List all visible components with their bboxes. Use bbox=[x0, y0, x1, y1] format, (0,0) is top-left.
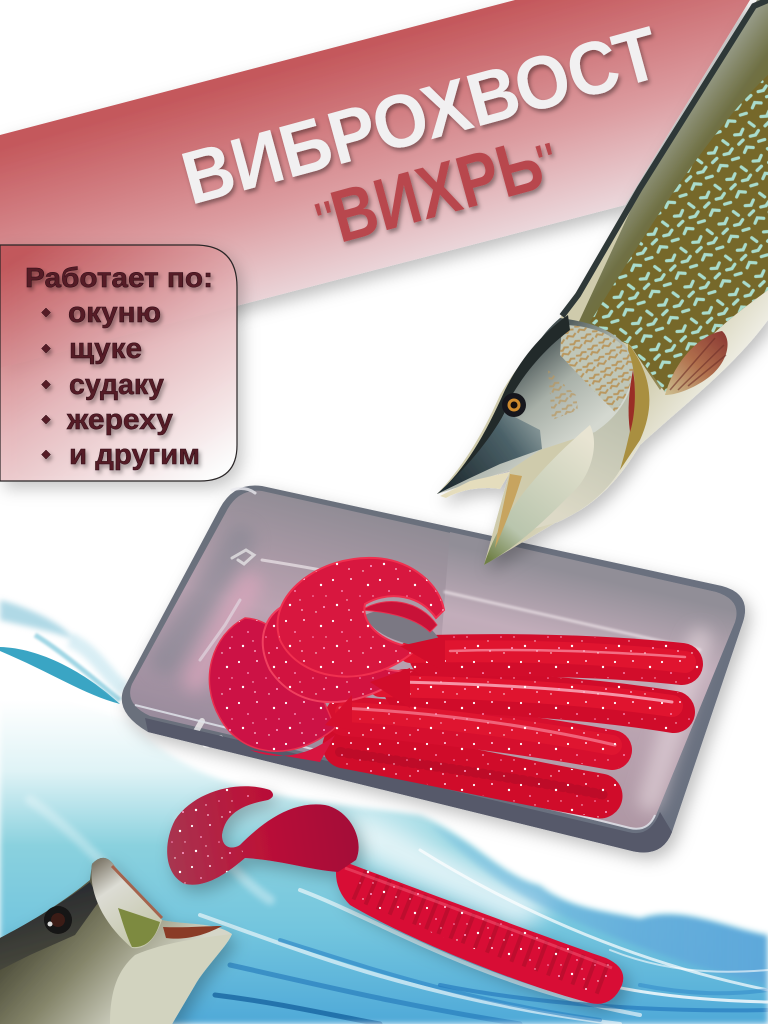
list items: окуню bbox=[68, 297, 161, 329]
pike back and pattern bbox=[575, 0, 768, 392]
bass eye bbox=[44, 906, 72, 934]
lure body 3 bbox=[345, 716, 612, 750]
lure sparkles bbox=[358, 884, 606, 980]
panel heading: Работает по: bbox=[25, 262, 213, 293]
lures in tray bbox=[209, 558, 685, 796]
water bbox=[0, 718, 768, 1024]
title quote close: " bbox=[530, 132, 565, 195]
bass lower jaw bbox=[110, 934, 232, 1024]
water streaks bbox=[30, 800, 768, 1024]
wave crest blue edge bbox=[430, 825, 768, 985]
bass bbox=[0, 858, 232, 1024]
tray floor right bbox=[430, 532, 736, 829]
bass upper jaw bbox=[91, 858, 162, 948]
pike gill plate bbox=[530, 370, 637, 530]
pike snout bbox=[437, 412, 542, 494]
pike upper lip bbox=[440, 472, 510, 498]
list items: судаку bbox=[69, 369, 164, 401]
lure necks bbox=[400, 636, 445, 672]
list items: жереху bbox=[66, 404, 173, 436]
white foam glow bbox=[350, 810, 560, 930]
lure body 1 bbox=[430, 655, 682, 664]
pike head ridge bbox=[437, 315, 570, 494]
title line 1: ВИБРОХВОСТ bbox=[173, 10, 668, 220]
hole behind tail bbox=[365, 610, 440, 645]
pike bbox=[437, 0, 768, 565]
pike head bbox=[437, 318, 636, 494]
lure body 2 bbox=[405, 690, 674, 712]
panel background bbox=[0, 245, 237, 481]
pike pectoral fin bbox=[665, 331, 728, 395]
list items bbox=[42, 297, 200, 471]
lure body 4 bbox=[345, 746, 600, 796]
title line 2: ВИХРЬ bbox=[322, 122, 552, 258]
tray floor bbox=[130, 491, 736, 829]
lure body bbox=[336, 862, 623, 1004]
tray outer shell bbox=[122, 485, 745, 852]
curl of second tail bbox=[362, 602, 437, 632]
tray reflections bbox=[165, 489, 700, 800]
panel: species list bbox=[0, 245, 237, 481]
wave background bbox=[0, 600, 768, 1024]
pike dorsal line bbox=[562, 0, 768, 316]
pike mouth bbox=[495, 474, 522, 548]
lure ribs bbox=[358, 884, 606, 980]
title quote open: " bbox=[309, 190, 344, 253]
lure tail bbox=[167, 786, 359, 885]
splash bbox=[0, 600, 125, 704]
panel text bbox=[25, 262, 213, 471]
bass mouth bbox=[163, 926, 222, 939]
tray front wall bbox=[145, 718, 672, 852]
lure bodies bbox=[345, 655, 682, 796]
bass dark back bbox=[0, 882, 100, 970]
list items: щуке bbox=[69, 333, 142, 365]
single lure bbox=[167, 786, 623, 1004]
bass head bbox=[0, 858, 232, 1024]
banner bbox=[0, 0, 750, 368]
pike body bbox=[437, 0, 768, 565]
pike lower jaw bbox=[484, 425, 594, 565]
title bbox=[173, 10, 668, 258]
pike eye bbox=[502, 393, 526, 417]
lure highlights bbox=[340, 650, 685, 796]
pike gill band bbox=[620, 343, 649, 470]
list items: и другим bbox=[69, 439, 200, 471]
tray bbox=[122, 485, 745, 852]
lure tails bbox=[209, 618, 335, 751]
